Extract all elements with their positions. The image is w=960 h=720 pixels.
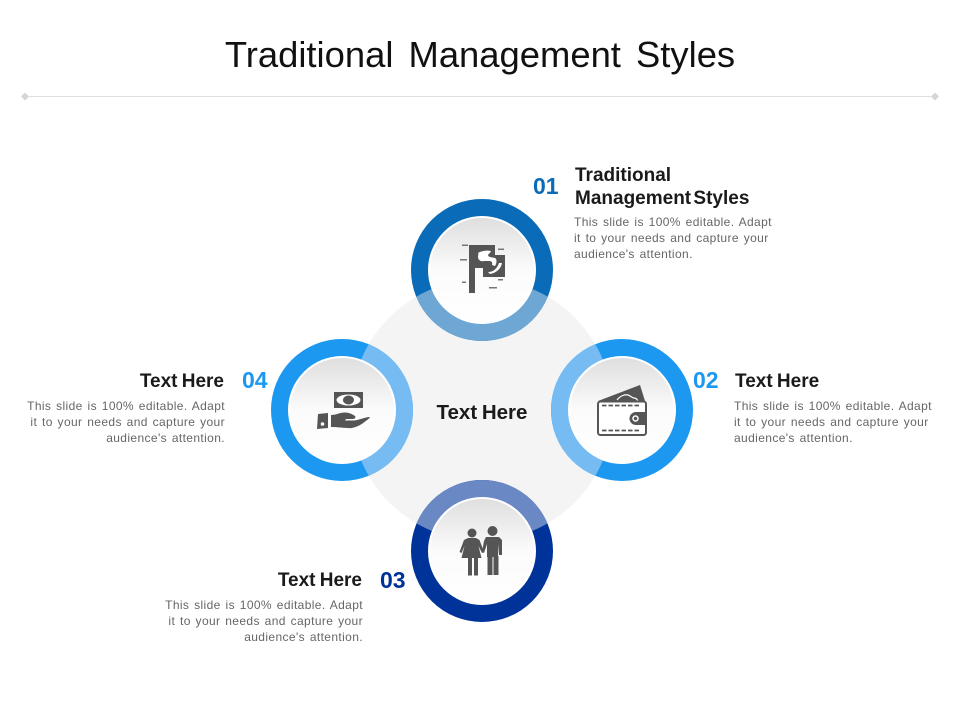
- number 02: 02: [693, 367, 719, 393]
- diagram: four rings around centre: [271, 199, 693, 622]
- item 01: [533, 165, 772, 261]
- description 02: audience's attention.: [734, 431, 853, 445]
- description 02: [734, 399, 932, 445]
- heading 02: Text Here: [735, 371, 819, 392]
- description 01: it to your needs and capture your: [574, 231, 769, 245]
- heading 01: Traditional: [575, 165, 671, 186]
- description 03: it to your needs and capture your: [168, 614, 363, 628]
- ring 03: [420, 489, 544, 613]
- heading 01: Management Styles: [575, 188, 749, 209]
- ring 01: [420, 208, 544, 332]
- description 04: audience's attention.: [106, 431, 225, 445]
- description 01: audience's attention.: [574, 247, 693, 261]
- ring 04: [280, 348, 404, 472]
- central grey circle: [351, 279, 613, 541]
- icon: couple: [460, 526, 502, 576]
- description 01: [574, 215, 772, 261]
- ring 02: [560, 348, 684, 472]
- title: Traditional Management Styles: [225, 34, 735, 75]
- icon: flag puzzle: [460, 244, 505, 293]
- heading 03: Text Here: [278, 570, 362, 591]
- description 02: This slide is 100% editable. Adapt: [734, 399, 932, 413]
- number 03: 03: [380, 567, 406, 593]
- heading 01: [575, 165, 749, 209]
- description 04: This slide is 100% editable. Adapt: [27, 399, 225, 413]
- item 04: [27, 367, 268, 445]
- item 03: [165, 567, 406, 644]
- title divider: [21, 92, 939, 100]
- icon: wallet: [598, 385, 647, 435]
- centre label: Text Here: [437, 401, 527, 424]
- number 01: 01: [533, 173, 559, 199]
- icon: hand with cash: [317, 392, 370, 429]
- description 01: This slide is 100% editable. Adapt: [574, 215, 772, 229]
- description 04: it to your needs and capture your: [30, 415, 225, 429]
- description 04: [27, 399, 225, 445]
- number 04: 04: [242, 367, 268, 393]
- description 03: audience's attention.: [244, 630, 363, 644]
- item 02: [693, 367, 932, 445]
- description 02: it to your needs and capture your: [734, 415, 929, 429]
- description 03: [165, 598, 363, 644]
- description 03: This slide is 100% editable. Adapt: [165, 598, 363, 612]
- heading 04: Text Here: [140, 371, 224, 392]
